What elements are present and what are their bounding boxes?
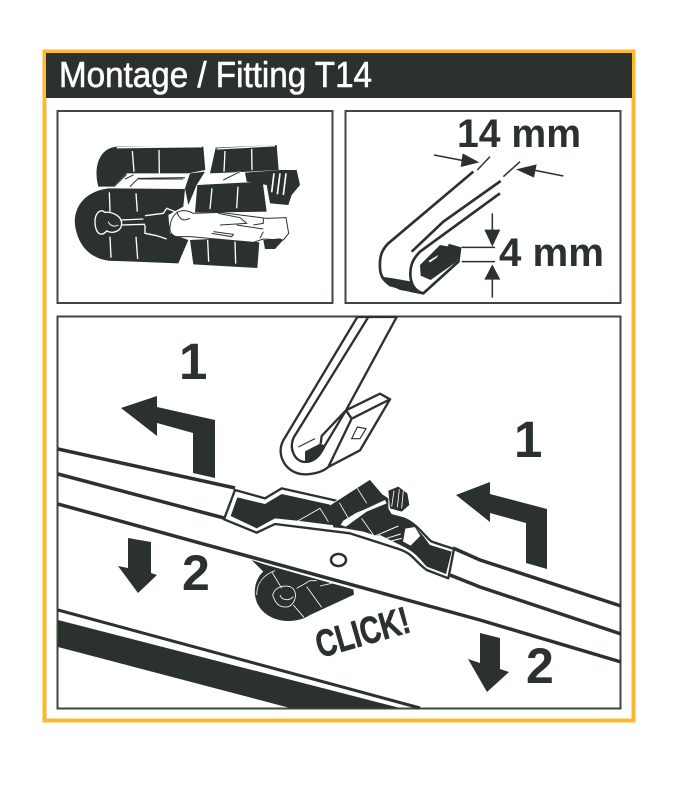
clip white slits <box>95 146 286 264</box>
arrow: step 1 left <box>121 396 215 478</box>
step number 1 left: 1 <box>179 333 207 390</box>
icon: wiper arm <box>281 317 397 474</box>
label: thickness: 4 mm <box>499 231 604 275</box>
arrow: step 1 right <box>456 482 547 569</box>
title: Montage / Fitting T14 <box>59 54 372 95</box>
click label: CLICK! <box>311 600 415 667</box>
icon: blade end with dimension arrows <box>380 153 563 298</box>
step number 1 right: 1 <box>514 411 542 468</box>
blade collar <box>224 488 454 578</box>
step number 2 left: 2 <box>182 545 210 601</box>
arrowheads <box>461 153 537 280</box>
panel: blade dimensions <box>346 111 620 303</box>
outer orange frame <box>44 52 634 720</box>
title bar <box>46 53 632 98</box>
arrow: step 2 left <box>118 538 157 593</box>
adapter clip on blade <box>330 479 421 546</box>
wiper rubber strip <box>58 610 420 708</box>
arrow: step 2 right <box>468 633 509 692</box>
wiper blade outlines <box>58 449 621 662</box>
collar dark plate <box>231 494 452 574</box>
icon: adapter clip <box>75 145 300 268</box>
panel: wiper adapter clip <box>58 111 332 303</box>
adapter clip under blade <box>252 560 354 621</box>
pivot hole <box>331 554 346 566</box>
step number 2 right: 2 <box>526 638 554 694</box>
clip white inner parts <box>170 211 289 242</box>
label: width: 14 mm <box>457 112 581 156</box>
panel: installation steps <box>58 316 621 708</box>
dimension lines <box>434 155 563 298</box>
